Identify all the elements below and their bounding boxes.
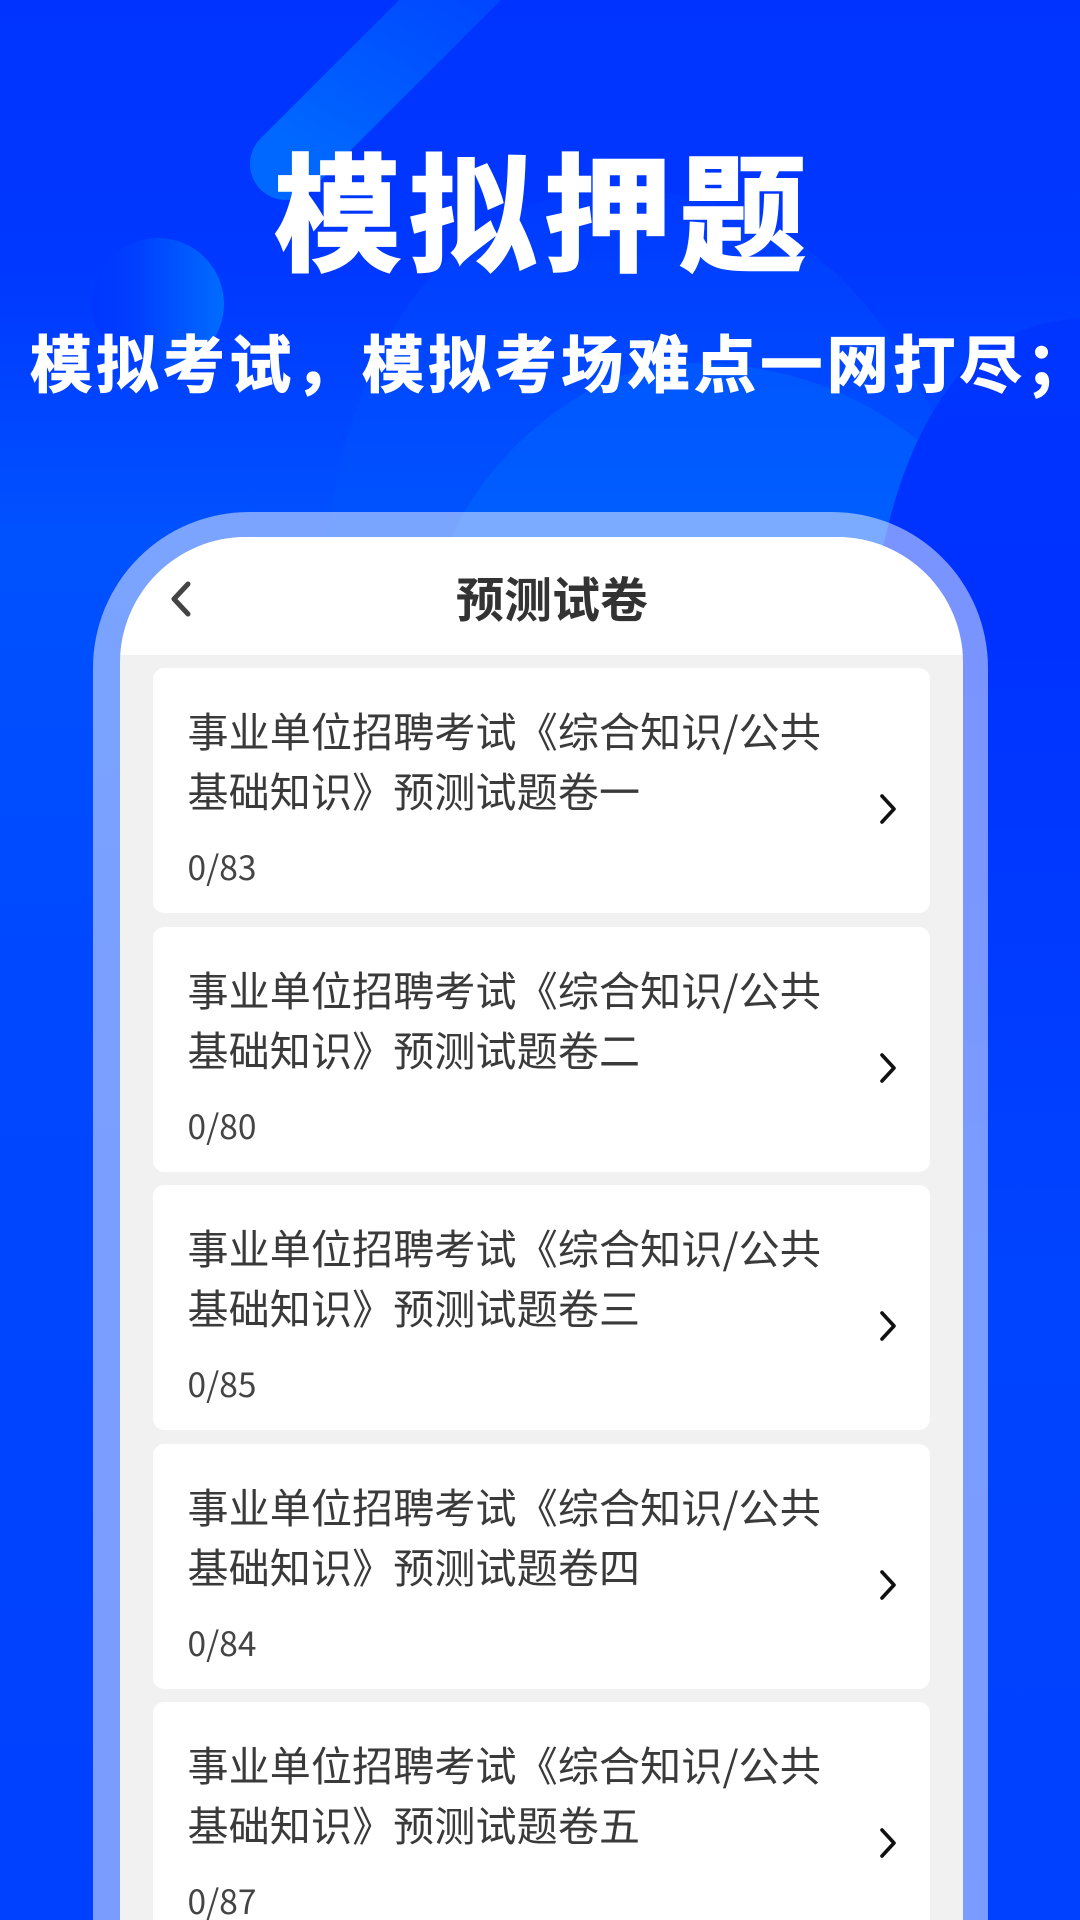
screen heading: 预测试卷 xyxy=(456,561,648,631)
navigation bar xyxy=(120,537,963,655)
icon: chevron xyxy=(880,1053,896,1083)
subtitle: 模拟考试，模拟考场难点一网打尽； xyxy=(30,315,1080,405)
icon: chevron xyxy=(880,794,896,824)
paper 1 title line 2: 基础知识》预测试题卷一 xyxy=(188,759,640,819)
card: paper 3 xyxy=(152,1185,930,1430)
phone frame xyxy=(93,512,988,1920)
paper 2 count: 0/80 xyxy=(188,1100,256,1148)
paper 3 title line 1: 事业单位招聘考试《综合知识/公共 xyxy=(188,1216,821,1276)
paper 1 title line 1: 事业单位招聘考试《综合知识/公共 xyxy=(188,699,821,759)
paper 2 title line 2: 基础知识》预测试题卷二 xyxy=(188,1018,640,1078)
card: paper 2 xyxy=(152,926,930,1172)
card: paper 5 xyxy=(152,1702,930,1920)
paper 3 count: 0/85 xyxy=(188,1358,256,1407)
paper 5 title line 2: 基础知识》预测试题卷五 xyxy=(188,1793,640,1853)
paper 1 count: 0/83 xyxy=(188,841,256,890)
icon: back arrow xyxy=(171,582,190,616)
paper 4 title line 1: 事业单位招聘考试《综合知识/公共 xyxy=(188,1474,821,1534)
icon: chevron xyxy=(880,1828,896,1858)
phone screen xyxy=(120,537,963,1920)
icon: chevron xyxy=(880,1311,896,1341)
icon: chevron xyxy=(880,1570,896,1600)
paper 4 title line 2: 基础知识》预测试题卷四 xyxy=(188,1534,640,1594)
paper 5 title line 1: 事业单位招聘考试《综合知识/公共 xyxy=(188,1733,821,1793)
card: paper 1 xyxy=(152,668,930,913)
title: 模拟押题 xyxy=(274,114,814,298)
card: paper 4 xyxy=(152,1444,930,1688)
paper 4 count: 0/84 xyxy=(188,1616,256,1666)
paper 3 title line 2: 基础知识》预测试题卷三 xyxy=(188,1276,640,1336)
paper 2 title line 1: 事业单位招聘考试《综合知识/公共 xyxy=(188,958,821,1018)
